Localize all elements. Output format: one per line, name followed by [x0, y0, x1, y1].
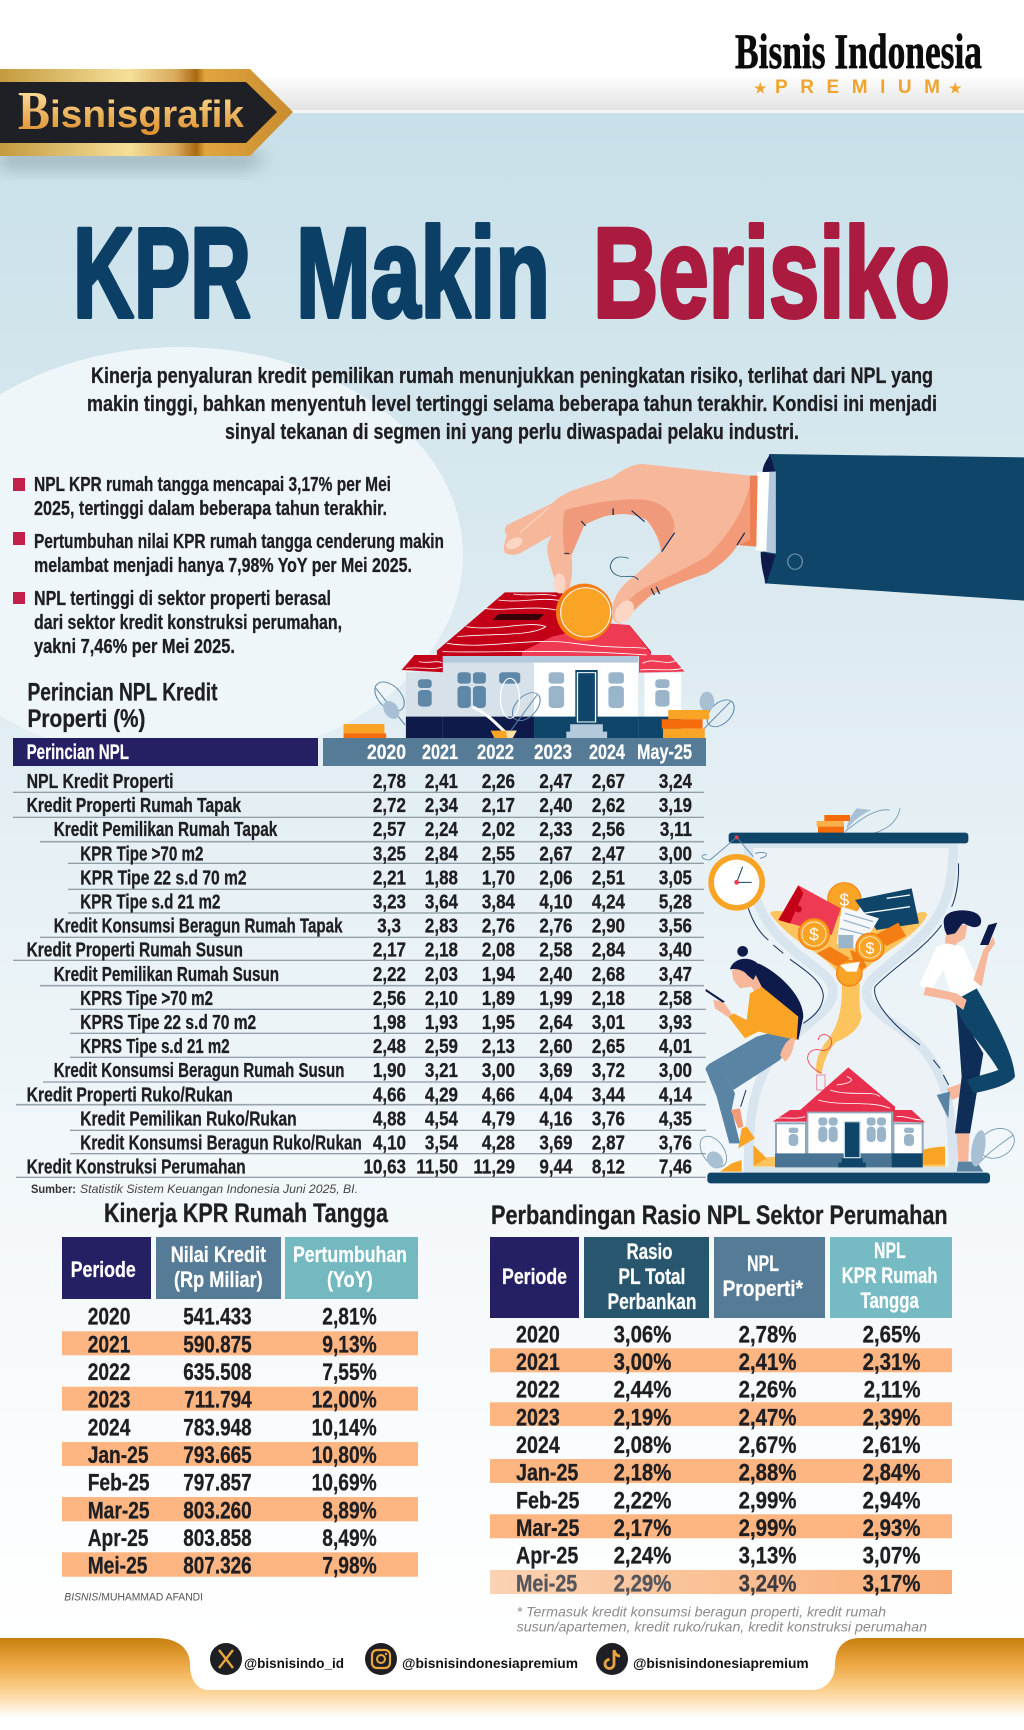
row labels: KPR Tipe s.d 21 m2 — [80, 892, 220, 914]
column 2021: 3,54 — [425, 1131, 459, 1154]
column 2023: 2,67 — [539, 842, 572, 865]
icon: sand — [753, 911, 945, 1167]
icon: sleeve — [755, 454, 1024, 601]
column 2020: 3,3 — [377, 914, 401, 937]
heading: Perincian NPL Kredit Properti — [28, 679, 218, 733]
column 2022: 4,28 — [482, 1131, 515, 1154]
column 2022: 11,29 — [473, 1155, 515, 1178]
column periode: Mar-25 — [88, 1496, 150, 1524]
icon: money items: $ — [809, 925, 819, 945]
table header — [13, 738, 706, 766]
column 2022: 2,02 — [482, 818, 515, 841]
row labels: Kredit Properti Rumah Susun — [27, 940, 243, 962]
column 2020: 2,78 — [373, 770, 406, 792]
column 2022: 3,00 — [482, 1059, 515, 1082]
column 2024: 2,90 — [592, 914, 625, 937]
banner: Bisnisgrafik — [0, 69, 293, 170]
icon: house — [402, 592, 685, 738]
icon: small house in hourglass — [773, 1035, 925, 1167]
table header: 2020 — [367, 741, 406, 764]
column pertumbuhan: 12,00% — [312, 1386, 377, 1413]
illustration: hourglass with people — [695, 808, 1019, 1183]
logo: Bisnis Indonesia Premium: ★ — [754, 80, 767, 96]
column May-25: 3,40 — [659, 938, 692, 961]
column 2024: 3,01 — [592, 1011, 625, 1033]
column 2022: 1,94 — [482, 962, 516, 985]
column 2020: 10,63 — [363, 1155, 406, 1178]
table header: 2024 — [589, 741, 625, 764]
row labels: KPR Tipe >70 m2 — [80, 843, 203, 865]
column May-25: 4,01 — [659, 1035, 692, 1057]
icon: coins on top — [817, 808, 900, 836]
column rasio PL: 3,00% — [614, 1348, 672, 1375]
column 2024: 2,62 — [592, 794, 625, 816]
column NPL KPR: 2,31% — [863, 1348, 921, 1375]
column May-25: 3,00 — [659, 1059, 692, 1082]
column 2023: 2,76 — [539, 914, 572, 937]
bullet 1 — [13, 474, 391, 520]
column nilai kredit: 797.857 — [183, 1469, 252, 1496]
column periode: Mei-25 — [88, 1551, 147, 1579]
title — [73, 202, 950, 345]
column 2024: 3,76 — [592, 1107, 625, 1130]
bullet 2 — [13, 531, 444, 577]
column 2022: 2,55 — [482, 842, 515, 865]
column 2022: 1,95 — [482, 1011, 515, 1033]
column 2021: 2,59 — [425, 1035, 458, 1057]
column NPL properti — [739, 1321, 797, 1597]
table header: 2023 — [534, 741, 572, 764]
column nilai kredit: 711.794 — [184, 1386, 252, 1413]
column NPL properti: 2,88% — [739, 1459, 797, 1486]
social: TikTok — [596, 1643, 809, 1675]
table header: Perincian NPL — [27, 741, 129, 764]
column NPL KPR: 2,39% — [863, 1404, 921, 1431]
column NPL properti: 3,24% — [739, 1570, 797, 1597]
column 2022: 4,79 — [482, 1107, 515, 1130]
heading: Perincian NPL Kredit Properti: Properti (%) — [28, 705, 146, 733]
bullet 3: yakni 7,46% per Mei 2025. — [34, 636, 235, 658]
column nilai kredit: 803.260 — [183, 1496, 252, 1524]
column 2020: 2,57 — [373, 818, 406, 841]
column 2022: 1,89 — [482, 987, 515, 1009]
column periode: 2024 — [88, 1413, 130, 1441]
column May-25: 3,76 — [659, 1131, 692, 1154]
column 2023: 3,69 — [539, 1059, 572, 1082]
social: Instagram: @bisnisindonesiapremium — [402, 1655, 578, 1671]
credit: BISNIS — [64, 1592, 99, 1604]
column 2024: 2,67 — [592, 770, 625, 792]
column 2020: 2,22 — [373, 962, 406, 985]
column May-25: 5,28 — [659, 890, 692, 913]
footnote — [517, 1604, 927, 1635]
column periode: 2023 — [88, 1386, 130, 1413]
title: Makin — [296, 202, 550, 345]
column 2024: 2,65 — [592, 1035, 625, 1057]
column 2021: 2,18 — [425, 938, 458, 961]
column 2023: 4,16 — [539, 1107, 572, 1130]
column NPL properti: 2,41% — [739, 1348, 797, 1375]
column 2023: 2,33 — [539, 818, 572, 841]
column rasio PL: 2,17% — [614, 1514, 672, 1541]
column periode — [516, 1320, 579, 1597]
column NPL KPR: 2,11% — [864, 1376, 921, 1403]
column 2023: 9,44 — [539, 1155, 573, 1178]
row labels: Kredit Pemilikan Ruko/Rukan — [80, 1108, 297, 1130]
column 2023: 2,58 — [539, 938, 572, 961]
social: Instagram — [365, 1643, 578, 1675]
column 2020: 2,17 — [373, 938, 406, 961]
social: X — [210, 1643, 344, 1675]
table header: Tangga — [860, 1288, 919, 1313]
intro paragraph: sinyal tekanan di segmen ini yang perlu diwaspadai pelaku industri. — [225, 419, 799, 444]
column May-25: 2,58 — [659, 987, 692, 1009]
icon: top and bottom bars — [707, 833, 990, 1183]
social: X: @bisnisindo_id — [244, 1655, 344, 1671]
credit: /MUHAMMAD AFANDI — [98, 1592, 203, 1604]
column NPL properti: 2,99% — [739, 1514, 797, 1541]
icon: plants at base — [695, 1123, 1019, 1172]
column NPL KPR: 2,93% — [863, 1514, 921, 1541]
column pertumbuhan — [312, 1302, 377, 1579]
column 2020 — [363, 770, 406, 1178]
column periode: Feb-25 — [88, 1469, 150, 1496]
column periode: Feb-25 — [516, 1486, 579, 1514]
table header: 2022 — [477, 741, 514, 764]
table header — [490, 1237, 952, 1318]
heading: Perincian NPL Kredit Properti: Perincian NPL Kredit — [28, 679, 218, 707]
column 2024: 4,24 — [592, 890, 626, 913]
column NPL properti: 2,78% — [739, 1321, 797, 1348]
icon: money items: $ — [866, 940, 875, 957]
column 2024: 2,84 — [592, 938, 626, 961]
column May-25: 3,11 — [660, 818, 692, 841]
column periode: 2022 — [516, 1376, 560, 1403]
logo: Bisnis Indonesia Premium — [735, 23, 982, 98]
column 2020: 2,21 — [373, 866, 406, 889]
column 2023: 3,69 — [539, 1131, 572, 1154]
icon: clock — [702, 835, 766, 911]
icon: plants and coin stacks around house — [344, 678, 740, 743]
column 2020: 2,72 — [373, 794, 406, 816]
column 2023: 1,99 — [539, 987, 572, 1009]
source note: Statistik Sistem Keuangan Indonesia Juni 2025, BI. — [80, 1182, 358, 1196]
column 2022: 1,70 — [482, 866, 515, 889]
column 2021: 4,29 — [425, 1083, 458, 1106]
column 2022: 2,17 — [482, 794, 515, 816]
column NPL properti: 2,67% — [739, 1431, 797, 1458]
column 2021: 2,83 — [425, 914, 458, 937]
column nilai kredit: 807.326 — [183, 1551, 252, 1579]
column rasio PL — [614, 1321, 672, 1597]
column 2023: 2,06 — [539, 866, 572, 889]
column 2021: 1,88 — [425, 866, 458, 889]
bullet 3: dari sektor kredit konstruksi perumahan, — [34, 612, 342, 634]
column 2022 — [473, 770, 516, 1178]
column rasio PL: 2,29% — [614, 1570, 672, 1597]
column May-25: 3,19 — [659, 794, 692, 816]
column 2020: 4,66 — [373, 1083, 406, 1106]
table header: 2021 — [422, 741, 458, 764]
column rasio PL: 3,06% — [614, 1321, 672, 1348]
column 2021: 2,10 — [425, 987, 458, 1009]
row labels: KPRS Tipe >70 m2 — [80, 988, 213, 1010]
column 2024: 2,47 — [592, 842, 625, 865]
table header: (YoY) — [327, 1267, 373, 1292]
column nilai kredit: 590.875 — [183, 1330, 252, 1358]
column NPL KPR: 3,07% — [863, 1542, 921, 1569]
column 2020: 1,90 — [373, 1059, 406, 1082]
column May-25: 7,46 — [659, 1155, 692, 1178]
column periode: 2020 — [88, 1302, 130, 1330]
title: KPR — [73, 202, 251, 345]
column 2021: 1,93 — [425, 1011, 458, 1033]
column NPL KPR: 2,84% — [863, 1459, 921, 1486]
table header: (Rp Miliar) — [174, 1267, 263, 1292]
column periode: 2021 — [88, 1330, 130, 1358]
intro paragraph — [87, 363, 937, 444]
column 2024: 3,44 — [592, 1083, 626, 1106]
column 2020: 1,98 — [373, 1011, 406, 1033]
table header: NPL — [874, 1238, 906, 1263]
table header: NPL — [747, 1251, 779, 1276]
footnote: * Termasuk kredit konsumsi beragun properti, kredit rumah — [517, 1604, 886, 1620]
column May-25: 3,05 — [659, 866, 692, 889]
column pertumbuhan: 9,13% — [322, 1330, 377, 1358]
icon: hand — [503, 464, 758, 625]
column pertumbuhan: 7,55% — [322, 1358, 377, 1386]
column 2020: 4,88 — [373, 1107, 406, 1130]
column NPL properti: 2,26% — [739, 1376, 797, 1403]
column 2021: 2,84 — [425, 842, 459, 865]
column May-25: 3,24 — [659, 770, 693, 792]
column 2024: 3,72 — [592, 1059, 625, 1082]
column May-25: 4,35 — [659, 1107, 692, 1130]
column NPL properti: 3,13% — [739, 1542, 797, 1569]
column periode: 2020 — [516, 1320, 560, 1348]
column pertumbuhan: 10,80% — [312, 1441, 377, 1469]
column 2021: 2,34 — [425, 794, 459, 816]
column 2023: 2,47 — [539, 770, 572, 792]
column 2020: 3,25 — [373, 842, 406, 865]
column periode: Jan-25 — [88, 1441, 149, 1469]
row labels: Kredit Konsumsi Beragun Rumah Tapak — [54, 916, 343, 938]
column 2020: 3,23 — [373, 890, 406, 913]
bullet 2: Pertumbuhan nilai KPR rumah tangga cenderung makin — [34, 531, 444, 553]
column 2024 — [592, 770, 626, 1178]
column 2021: 3,21 — [425, 1059, 458, 1082]
column pertumbuhan: 8,89% — [322, 1496, 377, 1524]
column pertumbuhan: 8,49% — [322, 1524, 377, 1552]
column rasio PL: 2,22% — [614, 1487, 672, 1514]
row labels: Kredit Konsumsi Beragun Ruko/Rukan — [80, 1132, 362, 1154]
column nilai kredit: 793.665 — [183, 1441, 252, 1469]
column 2024: 2,56 — [592, 818, 625, 841]
column 2024: 2,87 — [592, 1131, 625, 1154]
table header: PL Total — [618, 1264, 685, 1289]
icon: man — [919, 910, 1015, 1172]
bullet 1: NPL KPR rumah tangga mencapai 3,17% per Mei — [34, 474, 391, 496]
table: Kinerja KPR Rumah Tangga — [62, 1237, 418, 1579]
row labels: Kredit Konsumsi Beragun Rumah Susun — [54, 1060, 344, 1082]
column nilai kredit — [183, 1302, 252, 1579]
table header: Perbankan — [608, 1289, 696, 1314]
column nilai kredit: 803.858 — [183, 1524, 252, 1552]
column 2021: 4,54 — [425, 1107, 459, 1130]
column 2021: 11,50 — [416, 1155, 458, 1178]
table header: Nilai Kredit — [171, 1242, 267, 1267]
column May-25: 3,56 — [659, 914, 692, 937]
row labels: Kredit Konstruksi Perumahan — [27, 1157, 246, 1179]
row labels: Kredit Pemilikan Rumah Susun — [54, 964, 279, 986]
table header: Pertumbuhan — [293, 1242, 407, 1267]
column NPL KPR: 2,65% — [863, 1321, 921, 1348]
column 2023: 4,10 — [539, 890, 572, 913]
banner: Bisnisgrafik: B — [18, 80, 50, 141]
column 2023: 2,60 — [539, 1035, 572, 1057]
row labels: KPRS Tipe 22 s.d 70 m2 — [80, 1012, 256, 1034]
column periode: 2024 — [516, 1431, 560, 1458]
row labels: Kredit Pemilikan Rumah Tapak — [54, 819, 278, 841]
column NPL KPR: 2,61% — [863, 1431, 921, 1458]
column 2024: 8,12 — [592, 1155, 625, 1178]
icon: money items — [778, 883, 919, 986]
column periode — [88, 1302, 150, 1579]
table header: May-25 — [637, 741, 692, 764]
row labels — [27, 771, 362, 1179]
light background blob — [0, 347, 463, 763]
icon: woman — [705, 946, 803, 1172]
table: Perbandingan Rasio NPL — [490, 1237, 952, 1597]
column 2020: 2,56 — [373, 987, 406, 1009]
illustration: hand dropping coin into house — [344, 454, 1024, 743]
row labels: Kredit Properti Rumah Tapak — [27, 795, 242, 817]
column NPL KPR: 3,17% — [863, 1570, 921, 1597]
column NPL properti: 2,47% — [739, 1404, 797, 1431]
logo: Bisnis Indonesia Premium: ★ — [949, 80, 962, 96]
column 2022: 2,26 — [482, 770, 515, 792]
column 2021: 3,64 — [425, 890, 459, 913]
column pertumbuhan: 7,98% — [322, 1551, 377, 1579]
header strip — [0, 0, 1024, 113]
logo: Bisnis Indonesia Premium: PREMIUM — [775, 77, 940, 98]
source note: Sumber: — [31, 1182, 76, 1196]
column 2022: 3,84 — [482, 890, 516, 913]
column rasio PL: 2,08% — [614, 1431, 672, 1458]
icon: money items: $ — [840, 890, 850, 910]
column 2024: 2,51 — [592, 866, 625, 889]
column rasio PL: 2,24% — [614, 1542, 672, 1569]
column 2021: 2,24 — [425, 818, 459, 841]
column May-25: 3,47 — [659, 962, 692, 985]
column nilai kredit: 541.433 — [183, 1302, 252, 1330]
social: TikTok: @bisnisindonesiapremium — [633, 1655, 809, 1671]
row labels: KPRS Tipe s.d 21 m2 — [80, 1036, 230, 1058]
column 2021 — [416, 770, 459, 1178]
column NPL KPR — [863, 1321, 921, 1597]
column periode: Mar-25 — [516, 1514, 579, 1541]
table header: Periode — [502, 1264, 567, 1289]
icon: hourglass outline dashes — [741, 863, 959, 1107]
column periode: 2022 — [88, 1358, 130, 1386]
heading: Kinerja KPR Rumah Tangga: Kinerja KPR Rumah Tangga — [104, 1198, 389, 1228]
column May-25 — [659, 770, 693, 1178]
column 2022: 2,76 — [482, 914, 515, 937]
column 2022: 2,13 — [482, 1035, 515, 1057]
column pertumbuhan: 10,14% — [312, 1413, 377, 1441]
column 2022: 4,66 — [482, 1083, 515, 1106]
column 2020: 4,10 — [373, 1131, 406, 1154]
column 2021: 2,03 — [425, 962, 458, 985]
icon: coin — [556, 584, 613, 641]
column periode: Apr-25 — [516, 1542, 578, 1569]
bullet 1: 2025, tertinggi dalam beberapa tahun terakhir. — [34, 498, 387, 520]
row labels: KPR Tipe 22 s.d 70 m2 — [80, 867, 247, 889]
column rasio PL: 2,18% — [614, 1459, 672, 1486]
column nilai kredit: 635.508 — [183, 1358, 252, 1386]
column 2024: 2,68 — [592, 962, 625, 985]
column periode: 2023 — [516, 1403, 560, 1431]
column periode: Jan-25 — [516, 1459, 578, 1486]
table header — [62, 1237, 418, 1299]
row labels: NPL Kredit Properti — [27, 771, 174, 793]
column nilai kredit: 783.948 — [183, 1413, 252, 1441]
column rasio PL: 2,44% — [614, 1376, 672, 1403]
column periode: Apr-25 — [88, 1524, 148, 1552]
column 2023: 2,40 — [539, 794, 572, 816]
table header: Properti* — [723, 1276, 803, 1301]
column rasio PL: 2,19% — [614, 1404, 672, 1431]
column pertumbuhan: 2,81% — [322, 1302, 377, 1330]
column NPL properti: 2,99% — [739, 1487, 797, 1514]
bullet list — [13, 474, 444, 658]
column 2023: 2,40 — [539, 962, 572, 985]
column 2024: 2,18 — [592, 987, 625, 1009]
column NPL KPR: 2,94% — [863, 1487, 921, 1514]
column 2023 — [539, 770, 573, 1178]
table header: Periode — [71, 1257, 136, 1282]
column pertumbuhan: 10,69% — [312, 1469, 377, 1496]
footer band — [0, 1638, 1024, 1730]
footnote: susun/apartemen, kredit ruko/rukan, kredit konstruksi perumahan — [517, 1619, 927, 1635]
table: Perincian NPL — [13, 738, 706, 1179]
table header: Rasio — [626, 1239, 672, 1264]
column May-25: 3,00 — [659, 842, 692, 865]
row labels: Kredit Properti Ruko/Rukan — [27, 1084, 233, 1106]
column May-25: 3,93 — [659, 1011, 692, 1033]
column 2021: 2,41 — [425, 770, 458, 792]
bullet 3 — [13, 588, 342, 658]
column May-25: 4,14 — [659, 1083, 693, 1106]
banner: Bisnisgrafik: isnisgrafik — [50, 94, 245, 136]
icon: hourglass glass — [748, 843, 953, 1172]
bullet 2: melambat menjadi hanya 7,98% YoY per Mei 2025. — [34, 555, 412, 577]
column 2022: 2,08 — [482, 938, 515, 961]
column 2020: 2,48 — [373, 1035, 406, 1057]
column periode: Mei-25 — [516, 1569, 577, 1597]
column 2023: 2,64 — [539, 1011, 573, 1033]
column 2023: 4,04 — [539, 1083, 573, 1106]
table header: KPR Rumah — [842, 1263, 938, 1288]
column periode: 2021 — [516, 1348, 560, 1375]
bullet 3: NPL tertinggi di sektor properti berasal — [34, 588, 331, 610]
